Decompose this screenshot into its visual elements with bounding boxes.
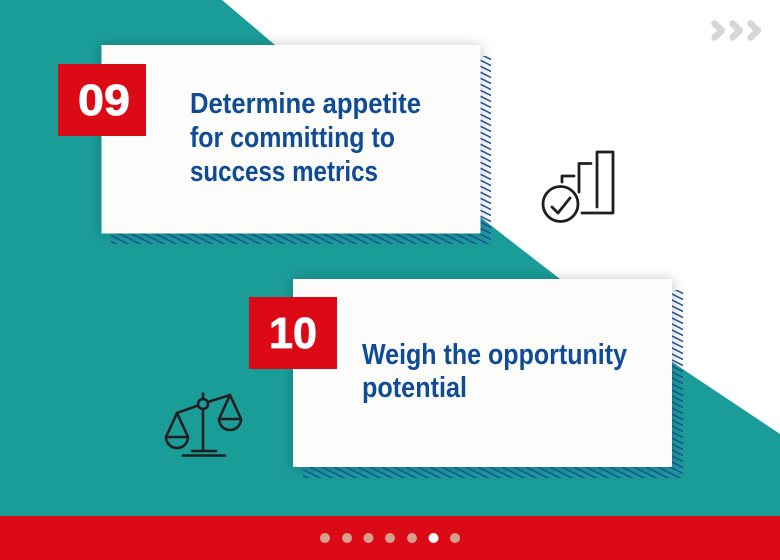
number badge 10: 10 [269,309,317,358]
heading: step 10 [362,339,627,404]
navigation chevrons [714,24,758,38]
icon: balance scale [166,394,241,456]
footer bar [0,516,780,560]
heading: step 09 [190,88,421,188]
panel: step 10 [249,279,683,478]
card [102,45,480,234]
pagination dots [320,533,460,543]
hatched offset [111,56,491,244]
heading: step 09: success metrics [190,156,378,188]
number badge 10 [249,297,337,369]
heading: step 09: Determine appetite [190,88,421,120]
hatched offset [303,290,683,478]
number badge 09: 09 [78,76,130,125]
card shadow [101,45,481,234]
card shadow [293,279,673,468]
card [293,279,672,467]
heading: step 10: Weigh the opportunity [362,339,627,371]
heading: step 10: potential [362,372,467,404]
heading: step 09: for committing to [190,122,395,154]
number badge 09 [58,64,146,136]
panel: step 09 [58,45,491,244]
icon: bar chart with check mark [543,152,613,222]
